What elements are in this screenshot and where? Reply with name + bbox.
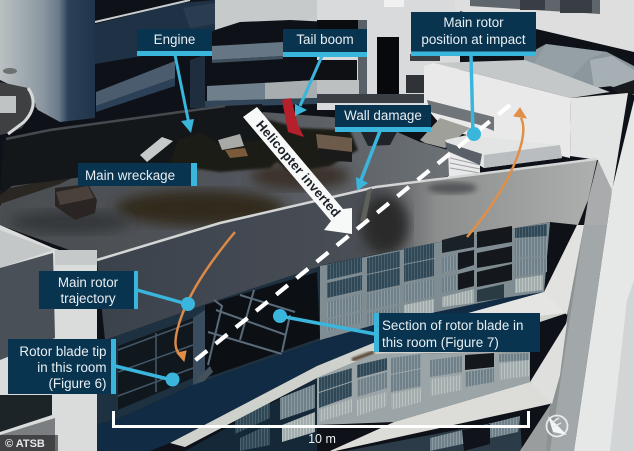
copyright credit bbox=[0, 435, 58, 451]
arrow: helicopter inverted bbox=[243, 107, 352, 234]
roof surface bbox=[0, 112, 449, 260]
label: Rotor blade tip in this room bbox=[8, 339, 180, 394]
upper right wall and ducts bbox=[455, 0, 634, 95]
label: Main rotor trajectory bbox=[39, 271, 195, 311]
upper floors bbox=[95, 0, 460, 112]
label: Main rotor position at impact bbox=[411, 12, 536, 141]
label: Main rotor trajectory: trajectory bbox=[60, 291, 116, 306]
right side fins and column bbox=[520, 100, 634, 451]
scale bar: 10 m: 10 m bbox=[308, 432, 336, 446]
label: Main rotor trajectory: Main rotor bbox=[58, 275, 119, 290]
front parapet wall bbox=[97, 159, 597, 340]
label: Tail boom bbox=[283, 29, 367, 116]
scale bar: 10 m bbox=[114, 411, 528, 446]
label: Main wreckage bbox=[78, 163, 197, 186]
label: Rotor blade tip in this room: Rotor blade tip bbox=[19, 344, 106, 359]
wreckage bbox=[140, 98, 398, 172]
north arrow icon bbox=[546, 416, 568, 436]
label: Main wreckage: Main wreckage bbox=[85, 168, 175, 183]
blue ledge bbox=[97, 292, 544, 451]
left corner block bbox=[0, 225, 97, 451]
label: Tail boom: Tail boom bbox=[296, 32, 354, 47]
orange trajectory arc: lower bbox=[176, 232, 235, 361]
arrow: helicopter inverted: Helicopter inverted bbox=[253, 117, 344, 220]
lower windows second row, left part bbox=[185, 378, 317, 451]
glass band with broken window bbox=[97, 222, 550, 425]
label: Section of rotor blade in this room: this room (Figure 7) bbox=[382, 335, 499, 350]
main rotor dashed line bbox=[192, 105, 510, 363]
copyright credit: © ATSB bbox=[5, 438, 45, 450]
upper left cylinder bbox=[0, 0, 95, 135]
rear parapet wall, dark bbox=[0, 104, 265, 220]
label: Rotor blade tip in this room: in this room bbox=[37, 360, 106, 375]
orange trajectory arc: upper bbox=[467, 108, 526, 237]
label: Engine: Engine bbox=[154, 32, 195, 47]
white building behind bbox=[317, 0, 460, 110]
lower windows second row, right part bbox=[317, 352, 530, 425]
label: Wall damage: Wall damage bbox=[344, 108, 422, 123]
label: Rotor blade tip in this room: (Figure 6) bbox=[48, 376, 106, 391]
rooftop block bbox=[420, 60, 628, 195]
label: Section of rotor blade in this room bbox=[273, 309, 540, 352]
lower white ledge and bottom floor bbox=[330, 382, 554, 451]
white sill bbox=[170, 292, 567, 447]
label: Main rotor position at impact: position at impact bbox=[421, 32, 526, 47]
right windows row bbox=[327, 224, 547, 331]
label: Section of rotor blade in this room: Section of rotor blade in bbox=[382, 318, 523, 333]
label: Engine bbox=[137, 29, 212, 133]
label: Main rotor position at impact: Main rotor bbox=[443, 15, 504, 30]
label: Wall damage bbox=[335, 105, 431, 191]
